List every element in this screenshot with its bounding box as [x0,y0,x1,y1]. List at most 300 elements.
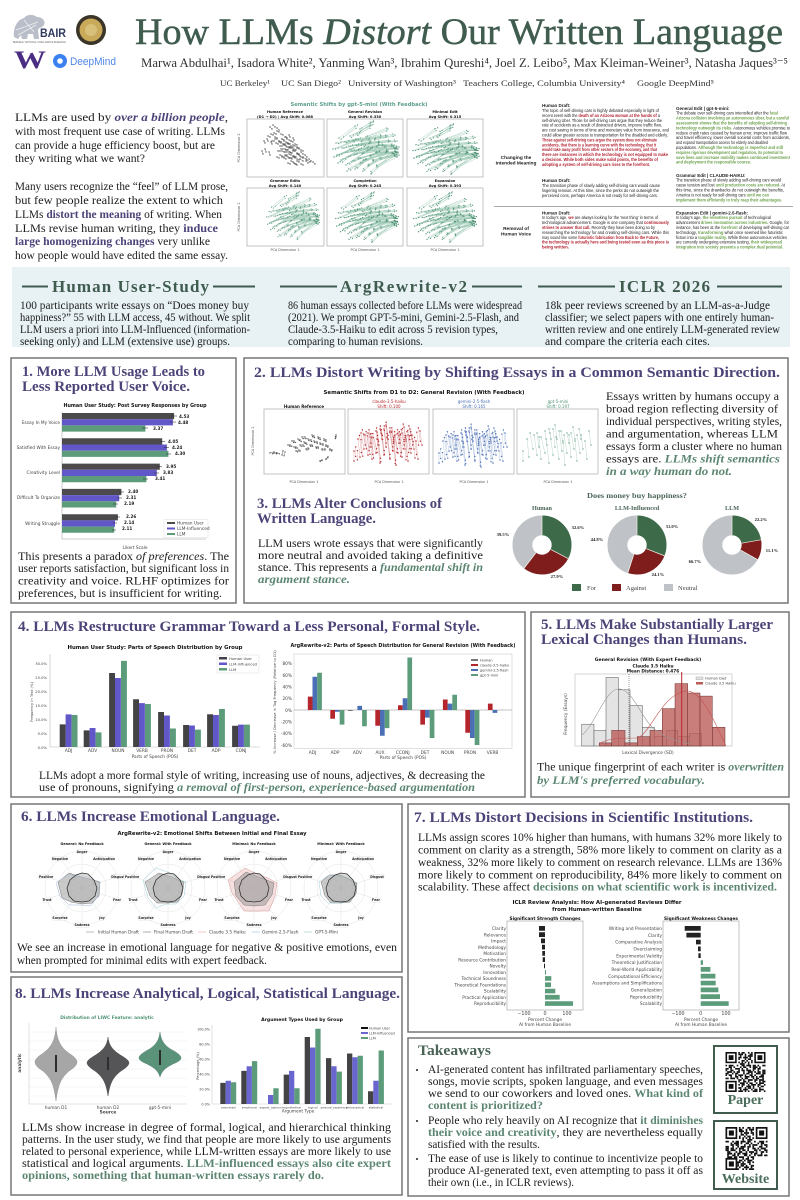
bar chart: post survey responses: Creativity Level [26,470,60,476]
pie charts: does money buy happiness: 44.8% [591,537,604,542]
radar legend: Gemini-2.5-Flash [262,930,299,936]
bar chart: post survey responses: Human User Study: Post Survey Responses by Group [64,403,207,409]
pie charts: does money buy happiness: 32.6% [572,525,585,530]
scatter chart: semantic shifts D1 to D2: PCA Dimension 2 [251,426,255,456]
panel 5: lexical changes [531,612,789,797]
text: human user study: seeking only) and LLM (extensive use) groups. [20,334,230,348]
heading 5: 5. LLMs Make Substantially Larger [541,617,774,633]
text: analytical: related to personal experience, while LLM-written essays are more likely to use [22,1144,391,1158]
histogram: lexical divergence: Human Dad [705,676,726,680]
LLM edit column: and deployment the responsible course. [676,160,751,165]
authors: Marwa Abdulhai¹, Isadora White², Yanming Wan³, Ibrahim Qureshi⁴, Joel Z. Leibo⁵, Max Kleiman-Weiner³, Natasha Jaques³⁻⁵ [141,55,788,70]
bar chart: parts of speech argrewrite: -60% [281,743,292,749]
text: stance: argument stance. [258,572,350,586]
row label: changing meaning: Intended Meaning [496,160,536,166]
scatter chart: semantic shifts D1 to D2: Shift: 0.165 [462,404,486,409]
radar charts: emotional shifts: Minimal: No Feedback [232,842,276,846]
histogram: lexical divergence: Mean Distance: 0.476 [627,668,679,674]
heading 4: 4. LLMs Restructure Grammar Toward a Less Personal, Formal Style. [18,619,480,635]
radar charts: emotional shifts: General: No Feedback [60,842,104,846]
bar chart: argument types: Percentage (%) [196,1052,200,1080]
strength bars: Clarity [492,926,506,932]
strength bars: 100 [562,1011,572,1017]
bullet 3: The ease of use is likely to continue to incentivize people to [428,1151,703,1165]
bar chart: post survey responses: 4.24 [172,445,182,450]
LLM edit column: reduce crash rates caused by human error, improve traffic flow [676,130,788,135]
bullet 1: AI-generated content has infiltrated parliamentary speeches, [428,1062,703,1076]
text: argrewrite [288,298,522,348]
panel 6: emotional language [11,804,402,972]
chart: semantic shifts by gpt-5-mini: Avg Shift: 0.315 [429,115,462,119]
text: lexical: by LLM's preferred vocabulary. [537,773,705,787]
pie charts: does money buy happiness: 27.9% [551,574,564,579]
panel 8: analytical language [11,977,402,1195]
heading 6: 6. LLMs Increase Emotional Language. [21,809,280,825]
affiliations [220,78,714,88]
bar chart: argument types: 80.0% [199,1042,211,1046]
text: scientific decisions: more likely to comment on reproducibility, 84% more likely to comment on [418,868,782,882]
radar legend: GPT-5-Mini [315,930,338,936]
bar chart: parts of speech user study: LLM [229,668,236,672]
human draft column: strives to answer that call. Recently they have been doing so by [542,225,656,230]
scatter chart: semantic shifts D1 to D2: Semantic Shifts from D1 to D2: General Revision (With Feedback) [324,390,524,396]
bar chart: parts of speech user study: Human User Study: Parts of Speech Distribution by Group [68,645,243,651]
human draft column: there are instances in which the technology is not equipped to make [542,152,668,157]
QR code: paper [714,1046,777,1113]
human draft column: lingering tension. At this time, since the perks do not outweigh the [542,188,659,193]
LLM edit column: populations. Although the technology is imperfect and still [676,145,783,150]
human draft column: Those against self-driving cars argue the system does not eliminate [542,137,657,142]
strength bars: 0 [543,1011,547,1017]
pie charts: does money buy happiness: LLM-Influenced [615,505,660,512]
LLM edit column [676,106,790,250]
bar chart: parts of speech argrewrite: 60% [282,673,292,679]
heading 3: Written Language. [257,511,376,527]
bar chart: parts of speech user study: 20.0% [35,690,47,694]
row label: removal of voice: Human Voice [501,232,531,238]
histogram: lexical divergence: Frequency (Essays) [563,693,569,735]
chart: semantic shifts by gpt-5-mini: PCA Dimension 1 [270,248,300,252]
strength bars: Theoretical Foundations [453,982,507,988]
histogram: lexical divergence: Claude 3.5 Haiku [705,682,736,686]
pie charts: does money buy happiness: 22.2% [755,517,768,522]
takeaway text: user reports satisfaction, but significant loss in [18,561,229,575]
takeaway text: creativity and voice. RLHF optimizes for [18,574,229,588]
heading 3 [257,496,442,527]
radar: minimal no feedback [210,850,297,927]
icon: BAIR bear: BERKELEY ARTIFICIAL INTELLIGENCE RESEARCH [13,40,66,44]
bar chart: parts of speech argrewrite: AUX [375,750,385,756]
bar chart: argument types: Human User [369,1026,391,1030]
pie charts: does money buy happiness: LLM [725,505,739,512]
bar chart: argument types: 100.0% [197,1028,211,1032]
text: stance [258,536,483,586]
panel 7: scientific institutions [408,804,789,1032]
text: scientific decisions: LLMs assign scores 10% higher than humans, with humans 32% more likely to [418,830,782,844]
bar chart: parts of speech user study [30,645,260,760]
heading 8: 8. LLMs Increase Analytical, Logical, Statistical Language. [15,986,400,1002]
text: analytical [22,1120,391,1182]
bar chart: post survey responses: 4.05 [168,439,178,444]
weakness bars: Percent Change [684,1017,718,1023]
row label: changing meaning: Changing the [501,155,532,161]
weakness bars: Reproducibility [630,994,662,1000]
pie legend: Neutral [678,585,698,592]
heading 1 [22,364,205,395]
bar chart: post survey responses: Writing Struggle [25,521,60,527]
human draft column: could allow greater access to transportation for the disabled and elderly. [542,132,668,138]
pie legend [572,584,698,592]
heading 1: Less Reported User Voice. [22,379,190,395]
radar legend: Claude 3.5 Haiku [209,930,246,936]
chart: semantic shifts by gpt-5-mini: Avg Shift: 0.393 [429,184,462,188]
intro text block: LLMs revise human writing, they induce [15,221,219,235]
bar chart: parts of speech argrewrite: ADJ [309,750,316,756]
bar chart: argument types: anecdotal [221,1106,236,1110]
bullet 1: content is prioritized? [428,1098,543,1112]
pie: LLM [712,515,762,565]
strength bars: Practical Application [462,995,506,1001]
row label: changing meaning [496,155,536,166]
pie charts: does money buy happiness [497,491,779,592]
bar charts: ICLR review analysis: from Human-written Baseline [552,907,642,913]
text: lexical: The unique fingerprint of each writer is overwritten [537,760,784,774]
strength bars: Resource Contribution [458,957,506,963]
chart: semantic shifts by gpt-5-mini: PCA Dimension 1 [430,248,460,252]
weakness bars: Real-World Applicability [611,967,662,973]
bullet 3: their own (i.e., in ICLR reviews). [428,1175,574,1189]
panel 2 and 3: semantic shift and stance [244,358,788,603]
chart: semantic shifts by gpt-5-mini: Minimal Edit [432,110,458,114]
bar chart: parts of speech argrewrite: -40% [281,731,292,737]
bar chart: argument types: emotional [242,1106,257,1110]
human draft column: accidents, that there is a learning curve with the technology, that it [542,142,656,147]
human draft column: The transition phase of slowly adding self-driving cars would cause [542,183,660,188]
strength bars: Percent Change [528,1017,562,1023]
radar charts: emotional shifts: General: With Feedback [144,842,192,846]
bar chart: post survey responses: 2.11 [122,526,132,531]
intro text block: but few people realize the extent to which [15,193,223,207]
icon: BAIR bear [13,15,67,44]
human draft column: rate of accidents as a result of distracted drivers, improve traffic flow, [542,123,662,128]
LLM edit column: implement them efficiently to truly reap their advantages. [676,197,782,202]
bar chart: argument types: 60.0% [199,1058,211,1062]
chart: semantic shifts by gpt-5-mini: Completion [353,179,377,183]
weakness bars: Computational Efficiency [608,974,662,980]
histogram: lexical divergence: General Revision (With Expert Feedback) [595,657,701,663]
row label: removal of voice [501,226,531,238]
bar chart: parts of speech user study: PRON [161,748,173,754]
bar chart: post survey responses: 2.31 [126,495,136,500]
intro text block: LLMs are used by over a billion people , [15,110,228,124]
text: emotional: We see an increase in emotional language for negative & positive emotions, even [17,940,397,954]
heading 5: Lexical Changes than Humans. [541,632,747,648]
text: human user study [20,298,251,348]
bar chart: post survey responses: Satisfied With Essay [17,445,60,451]
bar charts: ICLR review analysis: Significant Weakness Changes [664,916,738,922]
bar chart: parts of speech user study: 25.0% [35,676,47,680]
pie: LLM-influenced [617,515,665,574]
strength bars: Scalability [484,989,506,995]
pie legend: Against [626,585,646,592]
human draft column: may sound like some futuristic fabrication from Back to the Future, [542,235,659,240]
bar chart: parts of speech argrewrite [273,643,516,761]
text: emotional [17,940,397,967]
bar chart: parts of speech argrewrite: -20% [281,720,292,726]
text: semantic shift explanation: broad region reflecting diversity of [606,402,778,416]
bar chart: post survey responses: 2.19 [124,501,134,506]
bar chart: parts of speech argrewrite: gpt-5-mini [480,674,498,678]
human draft column: the technology is actually here and being tested even as this piece is [542,240,669,245]
bar chart: parts of speech argrewrite: CCONJ [396,750,410,756]
takeaway text: This presents a paradox of preferences. The [18,549,229,563]
heading: ArgRewrite-v2: ArgRewrite-v2 [340,277,467,296]
weakness bars: Scalability [640,1001,662,1007]
text: stance: stance. This represents a fundamental shift in [258,560,483,574]
scatter chart: semantic shifts D1 to D2: PCA Dimension 1 [543,480,573,484]
bar chart: parts of speech argrewrite: claude-3.5-haiku [480,664,509,668]
weakness bars: Theoretical Justification [611,960,662,966]
LLM edit column: In today's age, the relentless pursuit of technological [676,215,771,220]
heading: ICLR 2026: ICLR 2026 [619,277,710,296]
radar charts: emotional shifts [38,831,384,936]
pie: human [522,515,569,569]
strength bars: Reproducibility [474,1001,506,1007]
radar: minimal with feedback [297,850,384,927]
human draft column: recent event with the death of an Arizona woman at the hands of a [542,113,660,118]
bullet 1: we send to our coworkers and loved ones. What kind of [428,1086,704,1100]
text: human user study: happiness?” 55 with LLM access, 45 without. We split [20,310,251,324]
text: iclr: classifier; we select papers with one entirely human- [545,310,774,324]
pie charts: does money buy happiness: 66.7% [689,559,702,564]
chart: semantic shifts by gpt-5-mini: Human Reference [267,110,304,114]
text: scientific decisions [418,830,783,894]
chart: semantic shifts by gpt-5-mini: (D1 → D2) | Avg Shift: 0.068 [257,115,314,119]
strength bars: Relevance [484,932,506,938]
text: analytical: patterns. In the user study, we find that people are more likely to use arguments [22,1132,391,1146]
LLM edit column: Grammar Edit | CLAUDE-HAIKU: [676,173,746,178]
human draft column: a decision. While both sides make valid points, the benefits of [542,157,658,162]
bar chart: argument types: 0.0% [201,1102,211,1106]
chart: semantic shifts by gpt-5-mini: Avg Shift: 0.245 [349,184,382,188]
QR code: paper: Paper [728,1093,763,1108]
heading 3: 3. LLMs Alter Conclusions of [257,496,442,512]
bar chart: argument types: Argument Type [282,1108,315,1114]
bar chart: argument types: hypothetical [282,1106,301,1110]
LLM edit column: technology, transforming what once seemed like futuristic [676,230,784,235]
chart: semantic shifts by gpt-5-mini: Avg Shift: 0.140 [269,184,302,188]
logos: affiliations [13,15,116,74]
bar chart: parts of speech user study: CONJ [236,748,246,754]
LLM edit column: General Edit | gpt-5-mini: [676,106,730,111]
affiliations: University of Washington³ [348,78,456,88]
histogram: lexical divergence [563,657,736,756]
affiliations: Teachers College, Columbia University⁴ [463,78,625,88]
icon: DeepMind: DeepMind [70,56,116,68]
pie charts: does money buy happiness: 31.0% [666,524,679,529]
chart: semantic shifts by gpt-5-mini: PCA Dimension 2 [237,202,241,232]
QR code: website [714,1121,777,1189]
weakness bars: Assumptions and Simplifications [592,981,663,987]
LLM edit column: America is not ready for self-driving cars until we can [676,192,769,197]
text: scientific decisions: weakness, 32% more likely to comment on research relevance. LLMs are 136% [418,855,782,869]
human draft column: would take away profit from other sectors of the economy, and that [541,147,657,152]
chart: semantic shifts by gpt-5-mini: General Revision [348,110,383,114]
human draft column: In today's age, we are always looking for the 'next thing' in terms of [542,215,659,220]
affiliations: Google DeepMind⁵ [637,78,714,88]
bar chart: argument types: philosophical [346,1106,364,1110]
bar chart: parts of speech argrewrite: ADP [331,750,340,756]
heading 7: 7. LLMs Distort Decisions in Scientific Institutions. [414,810,753,826]
LLM edit column: cause tension and lost until production costs are reduced. At [676,183,786,188]
panel 4: grammar [11,612,525,797]
intro text block: Many users recognize the “feel” of LLM prose, [15,179,228,193]
human draft column: being written. [542,245,569,250]
strength bars: Methodology [478,945,506,951]
heading: Human User-Study: Human User-Study [52,277,210,296]
pie charts: does money buy happiness: 39.5% [497,532,510,537]
row label: removal of voice: Removal of [503,226,529,232]
text: semantic shift explanation [606,389,782,478]
radar charts: emotional shifts: Minimal: With Feedback [317,842,365,846]
bar chart: parts of speech user study: 15.0% [35,704,47,708]
bar chart: parts of speech user study: Frequency in Text (%) [30,682,34,722]
violin chart: analytic: Source [100,1110,116,1116]
bar chart: argument types: expert_opinion [260,1106,282,1110]
bar chart: post survey responses: 3.95 [166,464,176,469]
title: How LLMs Distort Our Written Language [135,12,783,53]
affiliations: UC Berkeley¹ [220,78,270,88]
bar chart: post survey responses: 3.37 [153,426,163,431]
scatter chart: semantic shifts D1 to D2: Shift: 0.197 [546,404,570,409]
scatter chart: semantic shifts D1 to D2: gpt-5-mini [548,399,568,404]
bullet 2 [416,1113,703,1151]
heading 1: 1. More LLM Usage Leads to [22,364,205,380]
radar legend: Initial Human Draft [98,930,139,936]
bar chart: parts of speech argrewrite: 40% [282,684,292,690]
icon: UC San Diego seal [76,15,106,45]
human draft column: self-driving Uber. Those for self-driving cars argue that they reduce the [542,118,662,123]
bar chart: parts of speech user study: ADJ [65,748,72,754]
LLM edit column: technology outweigh its risks. Autonomous vehicles promise to [676,125,790,130]
chart: semantic shifts by gpt-5-mini: Avg Shift: 0.330 [349,115,382,119]
human draft column: Human Draft: [542,103,571,108]
text: human user study: 100 participants write essays on “Does money buy [20,298,249,312]
violin chart: analytic: human D2 [97,1105,119,1111]
strength bars [453,926,573,1028]
chart: semantic shifts by gpt-5-mini: PCA Dimension 2 [237,133,241,163]
text: semantic shift explanation: essays form a cluster where no human [606,439,782,453]
bar chart: argument types: personal_experience [321,1106,348,1110]
histogram: lexical divergence: Lexical Divergence (SD) [622,750,674,756]
scatter chart: semantic shifts D1 to D2: PCA Dimension 1 [459,480,489,484]
weakness bars: AI from Human Baseline [675,1022,727,1028]
bar chart: parts of speech argrewrite: 20% [282,696,292,702]
intro text block: LLMs distort the meaning of writing. When [15,207,222,221]
panel: study summary band [12,267,790,348]
bar chart: parts of speech user study: Human User [229,657,252,661]
bar chart: argument types: logical [308,1106,318,1110]
bar chart: argument types [196,1017,395,1114]
bar chart: post survey responses: 3.83 [163,470,173,475]
bar chart: parts of speech user study: DET [188,748,197,754]
LLM edit column: The debate over self-driving cars intensified after the fatal [676,111,778,116]
chart: semantic shifts by gpt-5-mini: Semantic Shifts by gpt-5-mini (With Feedback) [290,102,428,108]
bar chart: parts of speech user study: LLM-Influenced [229,662,257,666]
bar charts: ICLR review analysis [453,900,739,1028]
LLM edit column: Expansion Edit | gemini-2.5-flash: [676,210,749,216]
human draft column: technological advancement. Google is one company that continuously [542,220,669,225]
intro text block: large homogenizing changes very unlike [15,234,210,248]
human draft column [541,103,670,250]
bullet 2: satisfied with the results. [428,1137,540,1151]
bar chart: parts of speech argrewrite: 80% [282,661,292,667]
bullet 3: produce AI-generated text, even attempting to pass it off as [428,1163,703,1177]
human draft column: are cost saving in terms of time and monetary value from insurance, and [542,128,669,133]
bar chart: parts of speech argrewrite: gemini-2.5-flash [480,668,508,672]
chart: semantic shifts by gpt-5-mini: Grammar Edits [270,179,300,183]
bullet 1 [416,1062,704,1112]
violin chart: analytic: human D1 [45,1105,67,1111]
strength bars: Innovation [483,970,506,976]
strength bars: −100 [517,1011,531,1017]
bar chart: parts of speech argrewrite: PRON [464,750,476,756]
bar chart: parts of speech user study: NOUN [112,748,124,754]
bar chart: post survey responses: 4.48 [178,420,188,425]
bar charts: ICLR review analysis: Significant Strength Changes [509,916,581,922]
text: iclr: 18k peer reviews screened by an LLM-as-a-Judge [545,298,770,312]
weakness bars: Overclaiming [634,946,662,952]
chart: semantic shifts by gpt-5-mini: PCA Dimension 1 [350,248,380,252]
human draft column: perceived cons, perhaps America is not ready for self-driving cars. [542,193,658,198]
bar chart: parts of speech user study: ADV [88,748,97,754]
bullet 3 [416,1151,703,1189]
bullet 2: their voice and creativity, they are nevertheless equally [428,1125,703,1139]
LLM edit column: advancement drives innovation across industries. Google, for [676,220,789,225]
pie charts: does money buy happiness: 24.1% [652,572,665,577]
bar chart: parts of speech user study: 30.0% [35,662,47,666]
scatter chart: semantic shifts D1 to D2: claude-3.5-haiku [372,399,406,404]
weakness bars: Clarity [648,933,662,939]
bar chart: parts of speech argrewrite: Human [480,658,493,662]
bullet 2: People who rely heavily on AI recognize that it diminishes [428,1113,703,1127]
scatter chart: semantic shifts D1 to D2 [251,390,598,484]
bar chart: parts of speech user study: ADP [212,748,221,754]
LLM edit column: and expand transportation access for elderly and disabled [676,140,768,145]
scatter chart: semantic shifts D1 to D2: Human Reference [284,404,324,409]
scatter chart: semantic shifts D1 to D2: Shift: 0.100 [377,404,401,409]
human draft column: Human Draft: [542,178,571,183]
bar chart: argument types: statistical [369,1106,383,1110]
bar chart: parts of speech argrewrite: ADV [353,750,362,756]
bar chart: parts of speech user study: VERB [136,748,148,754]
bar chart: argument types: 20.0% [199,1088,211,1092]
bar chart: post survey responses: LLM [177,532,186,538]
bar chart: argument types: 40.0% [199,1072,211,1076]
LLM edit column: this time, since the drawbacks do not outweigh the benefits, [676,188,784,192]
panel 1: LLM usage and voice [11,358,236,603]
LLM edit column: instance, has been at the forefront of developing self-driving car [676,225,789,230]
LLM edit column: fiction into a tangible reality. While these autonomous vehicles [676,235,788,240]
intro text block: with most frequent use case of writing. LLMs [15,124,225,138]
text: human user study: LLM users a priori into LLM-Influenced (information- [20,322,250,336]
bar chart: post survey responses: 4.53 [179,414,189,419]
violin chart: analytic: Distribution of LIWC Feature: analytic [60,1015,154,1021]
bar chart: post survey responses: 4.30 [175,451,185,456]
bar chart: post survey responses: 2.14 [124,520,134,525]
takeaway text: preferences, but is insufficient for writing. [18,586,222,600]
heading: takeaways: Takeaways [418,1043,491,1059]
